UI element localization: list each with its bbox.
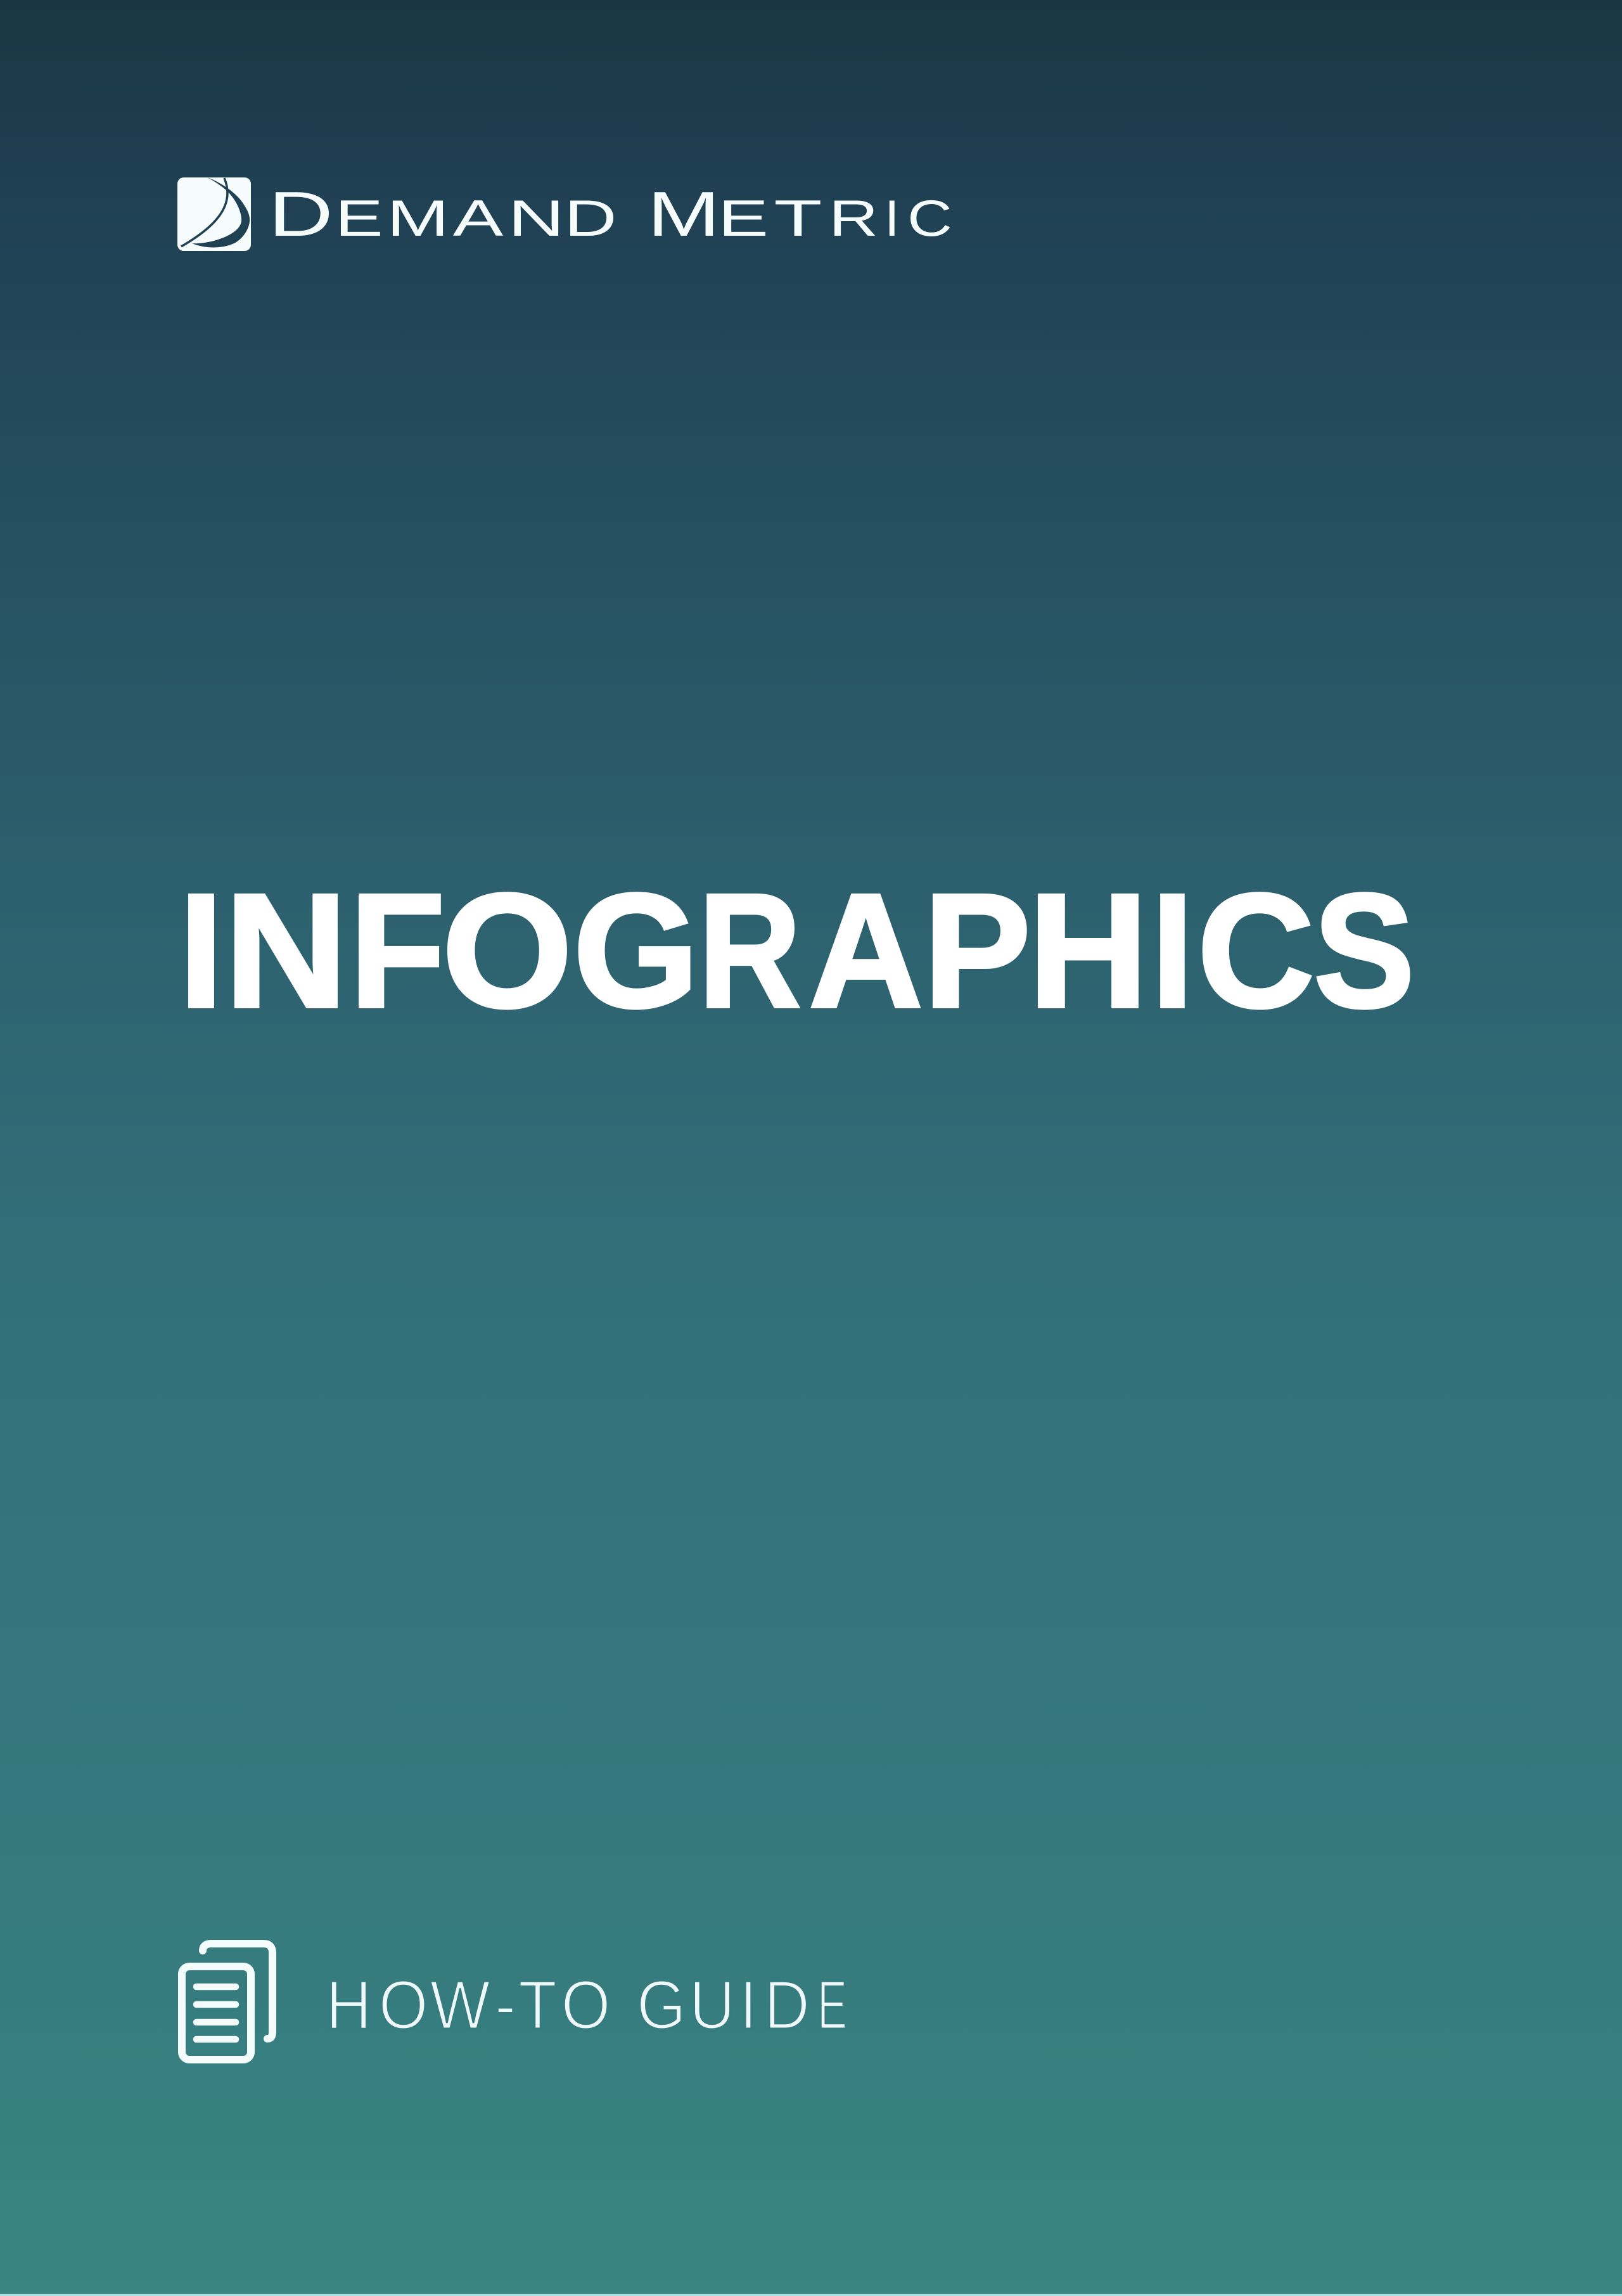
- subtitle: how-to guide: W: [430, 1966, 490, 2044]
- subtitle: how-to guide: D: [764, 1966, 810, 2044]
- title: N: [224, 861, 347, 1042]
- wordmark: A: [453, 190, 503, 247]
- subtitle: how-to guide: G: [637, 1966, 686, 2044]
- logo: Demand Metric: [177, 177, 952, 251]
- wordmark: I: [884, 190, 900, 247]
- subtitle: how-to guide: O: [379, 1966, 428, 2044]
- title: R: [699, 861, 801, 1042]
- title: A: [808, 861, 923, 1042]
- wordmark: C: [907, 190, 952, 247]
- icon: logo mark: [177, 177, 251, 251]
- title: S: [1313, 861, 1415, 1042]
- subtitle: how-to guide: I: [739, 1966, 757, 2044]
- subtitle: how-to guide: U: [689, 1966, 735, 2044]
- title: G: [573, 861, 699, 1042]
- title: P: [924, 861, 1031, 1042]
- title: C: [1197, 861, 1315, 1042]
- title: I: [179, 861, 223, 1042]
- subtitle: how-to guide: O: [561, 1966, 611, 2044]
- subtitle: how-to guide: -: [495, 1966, 516, 2044]
- wordmark: E: [718, 190, 769, 247]
- wordmark: D: [565, 190, 617, 247]
- subtitle: how-to guide: H: [326, 1966, 371, 2044]
- wordmark: D: [268, 179, 333, 250]
- title: I: [1152, 861, 1193, 1042]
- wordmark: T: [774, 190, 822, 247]
- subtitle: how-to guide: T: [518, 1966, 557, 2044]
- bottom edge strip: [0, 2293, 1622, 2296]
- wordmark: M: [648, 179, 720, 250]
- subtitle: how-to guide: E: [817, 1966, 847, 2044]
- title: F: [350, 861, 445, 1042]
- icon: documents: [182, 1944, 272, 2060]
- title: H: [1028, 861, 1148, 1042]
- wordmark: E: [335, 190, 383, 247]
- wordmark: N: [508, 190, 565, 247]
- wordmark: R: [829, 190, 878, 247]
- wordmark: M: [386, 190, 449, 247]
- title: O: [442, 861, 572, 1042]
